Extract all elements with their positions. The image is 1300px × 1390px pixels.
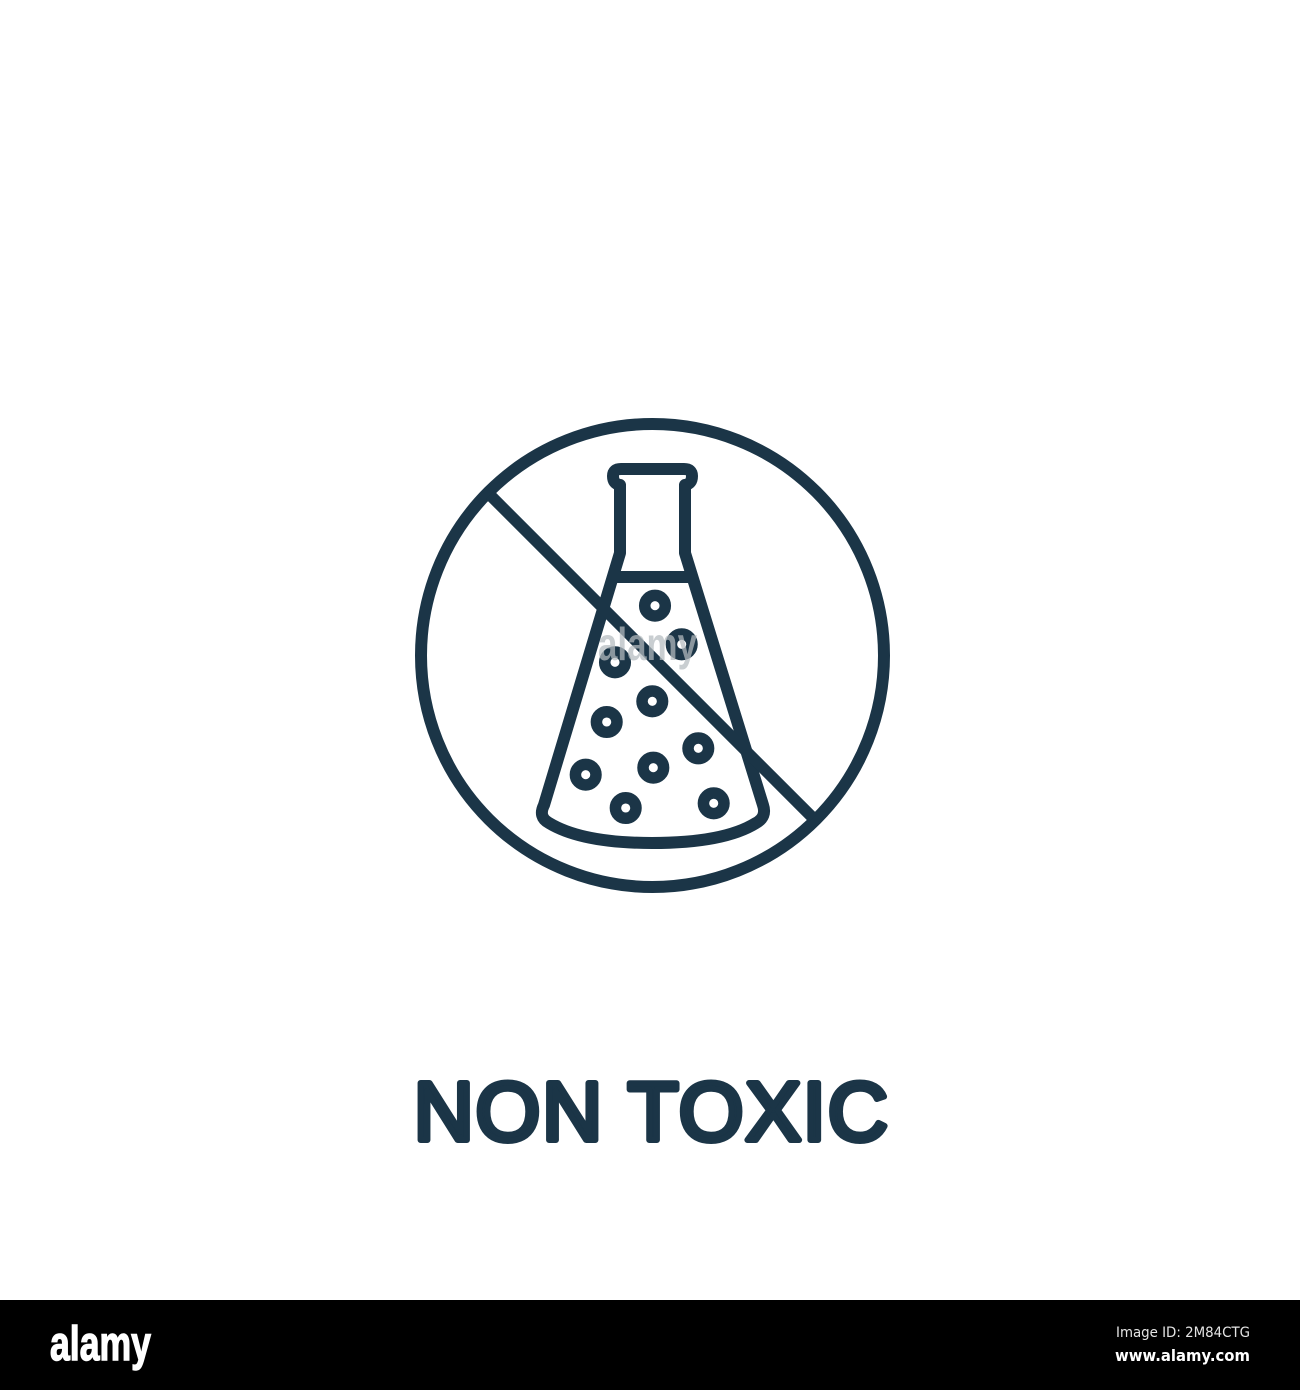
image id: Image ID: 2M84CTG (1116, 1325, 1250, 1341)
prohibition slash (490, 495, 813, 818)
icon: flask outline (542, 469, 764, 843)
icon: non toxic prohibition symbol with flask (421, 424, 884, 887)
prohibition ring (421, 424, 884, 887)
title: NON TOXIC (414, 1065, 890, 1158)
footer bar (0, 1300, 1300, 1390)
website: www.alamy.com (1115, 1346, 1250, 1365)
footer logo: alamy (50, 1318, 151, 1371)
watermark: alamy (598, 618, 697, 670)
icon: flask bubbles (575, 595, 724, 818)
